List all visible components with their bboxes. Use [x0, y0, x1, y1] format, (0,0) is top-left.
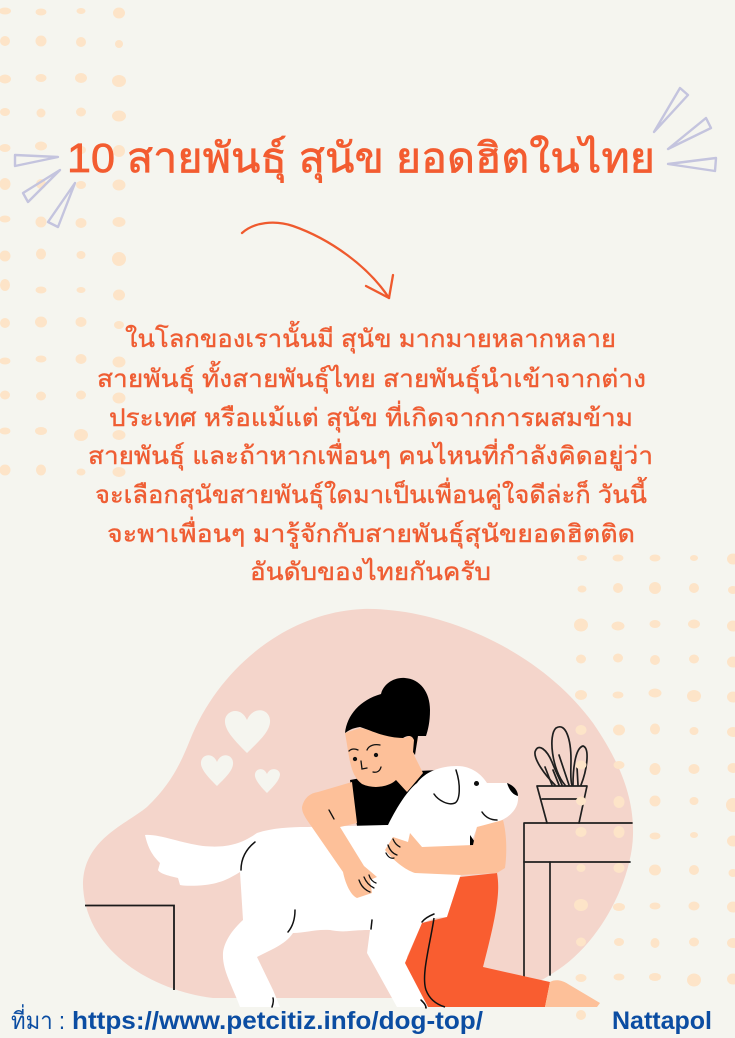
woman: right arm and hand — [385, 820, 506, 875]
intro text block — [88, 321, 653, 586]
intro text block: สายพันธุ์ ทั้งสายพันธุ์ไทย สายพันธุ์นำเข้าจากต่าง — [97, 361, 646, 394]
woman: facial features — [349, 745, 381, 772]
woman: foot — [545, 980, 600, 1007]
dog: nose — [507, 783, 518, 796]
intro text block: จะพาเพื่อนๆ มารู้จักกับสายพันธุ์สุนัขยอดฮิตติด — [107, 516, 635, 549]
dot pattern: top left — [0, 8, 126, 477]
woman: neck and face — [345, 728, 423, 792]
woman: orange trousers — [405, 873, 550, 1007]
left furniture outline — [85, 906, 174, 990]
side table and plant pot — [524, 727, 632, 978]
arrow — [242, 223, 393, 298]
dog: face details and fur lines — [241, 770, 497, 1008]
illustration: woman hugging a dog — [145, 678, 600, 1008]
footer author: Nattapol — [612, 1007, 712, 1035]
woman: hair and bun — [345, 678, 430, 755]
dot pattern: bottom right — [574, 554, 735, 1020]
footer source label: ที่มา : — [11, 1004, 65, 1035]
hearts — [201, 710, 280, 793]
intro text block: สายพันธุ์ และถ้าหากเพื่อนๆ คนไหนที่กำลังคิดอยู่ว่า — [88, 438, 653, 471]
pink background blob — [83, 609, 633, 998]
title: 10 สายพันธุ์ สุนัข ยอดฮิตในไทย — [67, 135, 655, 183]
footer source url: https://www.petcitiz.info/dog-top/ — [72, 1007, 483, 1035]
woman: black top under arm — [470, 835, 477, 846]
woman: trouser seam — [425, 918, 445, 1007]
fingers and arm crease — [329, 810, 400, 892]
intro text block: อันดับของไทยกันครับ — [250, 558, 491, 586]
woman: left arm and hand — [302, 782, 377, 898]
intro text block: จะเลือกสุนัขสายพันธุ์ใดมาเป็นเพื่อนคู่ใจดีล่ะก็ วันนี้ — [95, 477, 647, 510]
dog: paw mark — [421, 1000, 426, 1008]
woman: top — [350, 770, 445, 850]
intro text block: ประเทศ หรือแม้แต่ สุนัข ที่เกิดจากการผสมข้าม — [109, 400, 633, 433]
intro text block: ในโลกของเรานั้นมี สุนัข มากมายหลากหลาย — [125, 321, 616, 354]
sparkle: right of title — [654, 88, 716, 171]
dog: body, tail, legs and head — [145, 766, 518, 1007]
sparkle: left of title — [15, 155, 75, 227]
